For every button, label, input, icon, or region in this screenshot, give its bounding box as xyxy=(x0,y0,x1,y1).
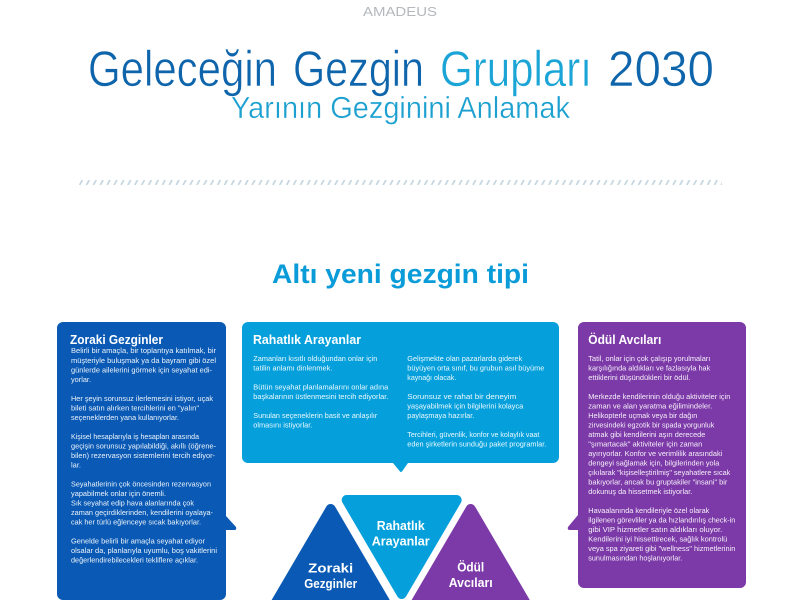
triangle: Rahatlık Arayanlar xyxy=(347,500,457,594)
triangle: Rahatlık Arayanlar: Rahatlık xyxy=(377,518,425,533)
callout shape: Rahatlık Arayanlar xyxy=(242,322,559,472)
panel text: left column: Bütün seyahat planlamalarını onlar adına xyxy=(253,382,389,392)
panel text xyxy=(588,354,735,562)
triangle: Rahatlık Arayanlar: Arayanlar xyxy=(372,534,430,549)
panel text: Her şeyin sorunsuz ilerlemesini istiyor, uçak xyxy=(71,394,213,403)
panel heading: Ödül Avcıları xyxy=(588,332,661,347)
triangle: Ödül Avcıları xyxy=(406,509,536,600)
panel text: bileti satın alırken tercihlerini en "yalın" xyxy=(71,404,199,412)
panel text: atmak gibi kendilerini aşırı derecede xyxy=(588,430,705,439)
panel text: Genelde belirli bir amaçla seyahat ediyor xyxy=(71,536,205,546)
panel text: karşılığında aldıkları ve fazlasıyla hak xyxy=(588,364,710,372)
panel text: left column: Zamanları kısıtlı olduğundan onlar için xyxy=(253,354,377,363)
panel text: cak her türlü eğlenceye sıcak bakıyorlar. xyxy=(71,518,201,526)
panel heading: Rahatlık Arayanlar xyxy=(253,333,361,347)
logo: Amadeus: AMADEUS xyxy=(363,5,437,19)
panel text: right column: Sorunsuz ve rahat bir deneyim xyxy=(407,392,516,401)
panel: Zoraki Gezginler xyxy=(57,322,236,600)
panel text: bilen) rezervasyon sistemlerini tercih ediyor- xyxy=(71,451,215,460)
panel text: right column xyxy=(407,354,546,448)
panel text: right column: büyüyen orta sınıf, bu grubun asıl büyüme xyxy=(407,364,544,372)
panel text: değerlendirebilecekleri tekliflere açıklar. xyxy=(71,556,198,564)
panel text: zaman geçirdiklerinden, kendilerini oyalaya- xyxy=(71,508,213,517)
panel text: veya spa ziyareti gibi "wellness" hizmetlerinin xyxy=(588,544,735,553)
panel text: lar. xyxy=(71,460,81,470)
panel text: Helikopterle uçmak veya bir dağın xyxy=(588,411,697,420)
panel text: Sık seyahat edip hava alanlarında çok xyxy=(71,498,194,508)
triangle diagram xyxy=(266,500,536,600)
title xyxy=(88,41,714,97)
panel text: Tatil, onlar için çok çalışıp yorulmaları xyxy=(588,354,710,363)
section heading: Altı yeni gezgin tipi xyxy=(272,259,529,289)
panel text: right column: paylaşmaya hazırlar. xyxy=(407,411,474,420)
panel text: Seyahatlerinin çok öncesinden rezervasyon xyxy=(71,480,211,488)
panel text: günlerde ailelerini görmek için seyahat edi- xyxy=(71,366,212,374)
panel text: left column: tatilin anlamı dinlenmek. xyxy=(253,364,332,372)
triangle: Zoraki Gezginler: Gezginler xyxy=(304,576,357,591)
panel text: seçeneklerden yana kullanıyorlar. xyxy=(71,413,179,422)
panel text: ettiklerini düşündükleri bir ödül. xyxy=(588,373,690,382)
panel text: bakıyorlar, ancak bu gruptakiler "insani" bir xyxy=(588,478,728,486)
panel text: yorlar. xyxy=(71,375,91,384)
title: Geleceğin xyxy=(88,41,277,97)
panel text: "şımartacak" aktiviteler için zaman xyxy=(588,440,702,448)
panel text: left column: olmasını istiyorlar. xyxy=(253,420,312,430)
panel text: dokunuş da hissetmek istiyorlar. xyxy=(588,487,692,496)
panel text: dengeyi sağlamak için, bilgilerinden yola xyxy=(588,458,720,468)
subtitle: Yarının Gezginini Anlamak xyxy=(231,90,570,125)
panel text: müşteriyle buluşmak ya da bayram gibi özel xyxy=(71,356,216,365)
triangle: Zoraki Gezginler xyxy=(266,509,396,600)
panel text: Havaalanında kendileriyle özel olarak xyxy=(588,506,709,515)
panel text: left column: Sunulan seçeneklerin basit ve anlaşılır xyxy=(253,411,378,420)
panel text: geçişin sorunsuz yapılabildiği, akıllı (öğrene- xyxy=(71,442,216,450)
panel text: ilgilenen görevliler ya da hızlandırılış check-in xyxy=(588,516,735,524)
panel text: Belirli bir amaçla, bir toplantıya katılmak, bir xyxy=(71,346,216,355)
title: Grupları xyxy=(440,41,592,97)
panel text: Merkezde kendilerinin olduğu aktiviteler için xyxy=(588,392,730,401)
panel text: Kendilerini iyi hissettirecek, sağlık kontrolü xyxy=(588,534,727,544)
panel text: right column: kaynağı olacak. xyxy=(407,373,456,382)
triangle: Ödül Avcıları: Ödül xyxy=(457,560,484,575)
title: Gezgin xyxy=(293,41,424,97)
triangle: Zoraki Gezginler: Zoraki xyxy=(308,561,353,576)
panel text: çıkılarak "kişiselleştirilmiş" seyahatlere sıcak xyxy=(588,468,730,477)
panel: Rahatlık Arayanlar xyxy=(242,322,559,472)
panel text: zirvesindeki egzotik bir spada yorgunluk xyxy=(588,420,714,430)
title: 2030 xyxy=(608,41,714,97)
panel text: Kişisel hesaplarıyla iş hesapları arasında xyxy=(71,432,200,441)
panel text: left column: başkalarının üstlenmesini tercih ediyorlar. xyxy=(253,392,388,401)
panel text xyxy=(71,346,217,564)
panel text: right column: Gelişmekte olan pazarlarda giderek xyxy=(407,354,522,363)
panel text: right column: yaşayabilmek için bilgilerini kolayca xyxy=(407,402,524,410)
triangle: Ödül Avcıları: Avcıları xyxy=(449,575,493,590)
callout shape: Zoraki Gezginler xyxy=(57,322,236,600)
panel text: left column xyxy=(253,354,389,430)
panel text: olsalar da, planlarıyla uyumlu, boş vakitlerini xyxy=(71,546,217,555)
panel text: zaman ve alan yaratma eğilimindeler. xyxy=(588,402,712,410)
panel text: gibi VIP hizmetler satın aldıkları oluyor. xyxy=(588,525,722,534)
callout shape: Ödül Avcıları xyxy=(568,322,746,588)
panel heading: Zoraki Gezginler xyxy=(70,333,163,347)
panel text: right column: Tercihleri, güvenlik, konfor ve kolaylık vaat xyxy=(407,430,540,439)
panel text: right column: eden şirketlerin sunduğu paket programlar. xyxy=(407,440,546,448)
panel: Ödül Avcıları xyxy=(568,322,746,588)
panel text: ayırıyorlar. Konfor ve verimlilik arasındaki xyxy=(588,449,723,458)
panel text: sunulmasından hoşlanıyorlar. xyxy=(588,554,682,562)
panel text: yapabilmek onlar için önemli. xyxy=(71,489,166,498)
